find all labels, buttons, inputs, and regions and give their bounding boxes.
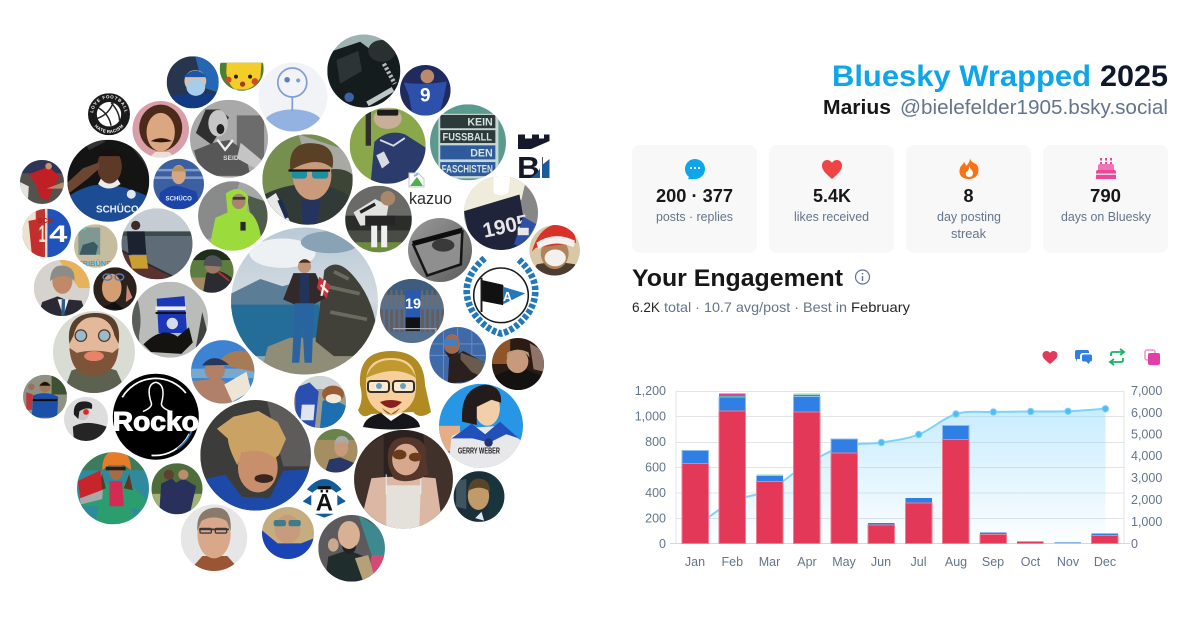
avatar: red and blue number 14 shirts: 1 bbox=[39, 221, 46, 248]
logo: BI castle bbox=[517, 134, 550, 185]
avatar: man with Norwegian flag on mountain bbox=[231, 228, 378, 374]
avatar: player holding shirt 9 bbox=[400, 65, 451, 116]
avatar: blonde keeper in blue kit bbox=[153, 159, 204, 209]
panel: posts and replies: 200 · 377 bbox=[656, 186, 733, 206]
avatar: red player kicking bbox=[20, 160, 64, 204]
avatar: bald man with cat bbox=[318, 515, 385, 582]
right axis labels: 3,000 bbox=[1131, 471, 1162, 485]
avatar: player in blue and black kit bbox=[23, 375, 67, 419]
broken image with alt text: kazuo: kazuo bbox=[409, 190, 452, 208]
legend: likes heart bbox=[1042, 351, 1058, 364]
engagement summary: February bbox=[851, 299, 910, 315]
month labels: Jan bbox=[685, 555, 705, 569]
bar: Apr bbox=[794, 394, 820, 544]
icon: birthday cake bbox=[1096, 158, 1116, 179]
avatar: dark blonde man selfie bbox=[454, 471, 504, 522]
logo: blue Ä badge bbox=[303, 479, 346, 518]
icon: heart bbox=[822, 160, 842, 179]
icon: flame bbox=[959, 158, 978, 179]
month labels: Apr bbox=[797, 555, 817, 569]
avatar: man in navy jersey bbox=[350, 108, 426, 184]
panel: likes received bbox=[769, 145, 894, 253]
month labels: Jul bbox=[911, 555, 926, 569]
right axis labels bbox=[1131, 384, 1162, 551]
avatar: man with glasses on light background bbox=[181, 504, 247, 571]
left axis labels bbox=[635, 384, 666, 551]
avatar: crowd with number 19 bbox=[380, 279, 444, 343]
avatar: man with moustache bbox=[132, 101, 189, 158]
month labels bbox=[685, 555, 1116, 569]
avatar: Kein Fussball den Faschisten banner bbox=[430, 104, 506, 180]
right axis labels: 2,000 bbox=[1131, 493, 1162, 507]
avatar: 1905 jersey bbox=[464, 176, 538, 250]
panel: days on Bluesky bbox=[1043, 145, 1168, 253]
memoji: glasses and blond hair bbox=[358, 351, 431, 430]
left axis labels: 600 bbox=[645, 460, 666, 474]
left axis labels: 800 bbox=[645, 435, 666, 449]
avatar: grey haired man outdoors bbox=[314, 429, 358, 473]
avatar: two mascots bbox=[294, 376, 346, 428]
panel: likes received: 5.4K bbox=[813, 186, 851, 206]
right axis labels: 1,000 bbox=[1131, 515, 1162, 529]
avatar: black and white shouting footballer bbox=[190, 100, 268, 178]
avatar: man in grey beanie bbox=[190, 249, 234, 293]
right axis labels: 6,000 bbox=[1131, 406, 1162, 420]
legend: replies bubbles bbox=[1075, 350, 1092, 364]
bar: Jul bbox=[906, 498, 932, 544]
avatar: red and blue number 14 shirts bbox=[22, 209, 71, 257]
month labels: May bbox=[832, 555, 857, 569]
avatar: blond footballer bbox=[200, 400, 311, 511]
user name and handle: Marius bbox=[823, 97, 891, 119]
month labels: Jun bbox=[871, 555, 891, 569]
engagement summary: 6.2K bbox=[632, 299, 661, 315]
avatar: two men in kit bbox=[152, 463, 202, 514]
panel: likes received: likes received bbox=[794, 210, 869, 224]
left axis labels: 200 bbox=[645, 512, 666, 526]
avatar: Schuco player pointing at head bbox=[67, 140, 149, 222]
broken image with alt text: kazuo bbox=[409, 173, 452, 208]
legend: quotes copy bbox=[1145, 350, 1160, 365]
panel: day posting streak bbox=[906, 145, 1031, 253]
avatar: Love Football Hate Racism badge bbox=[88, 93, 130, 136]
legend icons bbox=[1042, 349, 1160, 365]
panel: posts and replies: posts · replies bbox=[656, 210, 733, 224]
avatar: Rocko logo bbox=[113, 374, 199, 460]
avatar: man in neon green rain jacket bbox=[198, 181, 268, 251]
avatar: eye behind black glasses bbox=[408, 218, 472, 282]
avatar: man reading under parasol bbox=[191, 340, 254, 404]
right axis labels: 7,000 bbox=[1131, 384, 1162, 398]
icon: chat bubble bbox=[685, 159, 705, 179]
left axis labels: 1,200 bbox=[635, 384, 666, 398]
panel: days on Bluesky: 790 bbox=[1090, 186, 1121, 206]
bar: Jan bbox=[682, 450, 708, 544]
avatar: camera equipment bbox=[327, 34, 400, 108]
panel: day posting streak: streak bbox=[951, 227, 987, 241]
avatar: hand with glasses bbox=[93, 267, 137, 311]
bar: Feb bbox=[719, 394, 746, 544]
month labels: Aug bbox=[945, 555, 967, 569]
right axis labels: 0 bbox=[1131, 537, 1138, 551]
avatar: drawn bearded man bbox=[53, 311, 135, 393]
heading: Your Engagement: Your Engagement bbox=[632, 265, 843, 292]
bar: Jun bbox=[868, 523, 894, 544]
engagement summary: total · 10.7 avg/post · Best in bbox=[664, 299, 847, 315]
avatar cloud bbox=[20, 34, 580, 582]
right axis labels: 4,000 bbox=[1131, 449, 1162, 463]
month labels: Nov bbox=[1057, 555, 1080, 569]
panel: posts and replies bbox=[632, 145, 757, 253]
legend: reposts arrows bbox=[1110, 349, 1124, 365]
avatar: clown nose man bbox=[64, 397, 108, 441]
icon: info bbox=[856, 270, 870, 284]
cumulative area bbox=[695, 409, 1105, 544]
month labels: Mar bbox=[759, 555, 780, 569]
bar: Aug bbox=[942, 426, 969, 544]
user name and handle: @bielefelder1905.bsky.social bbox=[900, 97, 1168, 119]
bar: Sep bbox=[980, 532, 1006, 544]
stacked bars bbox=[682, 394, 1118, 544]
left axis labels: 0 bbox=[659, 537, 666, 551]
avatar: dejected player in white kit bbox=[345, 186, 412, 256]
month labels: Sep bbox=[982, 555, 1004, 569]
avatar: smiling man in dark jumper bbox=[492, 338, 544, 390]
cumulative line bbox=[695, 406, 1109, 528]
avatar: woman with tortoiseshell sunglasses bbox=[354, 430, 453, 529]
avatar: man with mirrored sunglasses in blue bbox=[262, 507, 314, 559]
chart: monthly engagement bbox=[635, 384, 1162, 569]
title: Bluesky Wrapped bbox=[832, 60, 1091, 93]
avatar: blue Arminia scarf and hat bbox=[132, 282, 208, 358]
title: 2025 bbox=[1100, 60, 1168, 93]
logo: BI castle: BI bbox=[517, 150, 549, 185]
avatar: rat statue and window bbox=[74, 224, 118, 268]
avatar: pikachu bbox=[220, 63, 264, 94]
panel: days on Bluesky: days on Bluesky bbox=[1061, 210, 1152, 224]
gridlines bbox=[676, 391, 1124, 544]
bar: May bbox=[831, 439, 858, 544]
avatar: Captain Tsubasa style anime player in Gerry Weber shirt bbox=[439, 384, 523, 468]
avatar: man with teal sunglasses bbox=[262, 134, 353, 225]
avatar: child's drawing bbox=[258, 62, 328, 138]
avatar: man at the lake bbox=[122, 208, 192, 279]
logo: blue Ä badge: Ä bbox=[316, 489, 333, 516]
left axis labels: 1,000 bbox=[635, 410, 666, 424]
avatar: santa hat and mask bbox=[529, 224, 580, 276]
bar: Mar bbox=[756, 474, 783, 544]
panel: day posting streak: day posting bbox=[937, 210, 1001, 224]
avatar: red and blue number 14 shirts: 4 bbox=[49, 221, 68, 248]
left axis labels: 400 bbox=[645, 486, 666, 500]
avatar: older man in suit bbox=[34, 260, 90, 316]
month labels: Feb bbox=[722, 555, 743, 569]
bar: Nov bbox=[1054, 542, 1081, 544]
month labels: Oct bbox=[1021, 555, 1041, 569]
month labels: Dec bbox=[1094, 555, 1116, 569]
bar: Dec bbox=[1092, 534, 1118, 544]
logo: Arminia Bielefeld crest bbox=[467, 258, 535, 334]
engagement summary bbox=[632, 299, 910, 315]
right axis labels: 5,000 bbox=[1131, 428, 1162, 442]
avatar: man with face mask bbox=[167, 56, 219, 108]
panel: day posting streak: 8 bbox=[963, 186, 974, 206]
avatar: man in green flamingo suit bbox=[77, 450, 149, 524]
avatar: bearded man with microphone bbox=[429, 327, 486, 384]
bar: Oct bbox=[1017, 542, 1044, 544]
